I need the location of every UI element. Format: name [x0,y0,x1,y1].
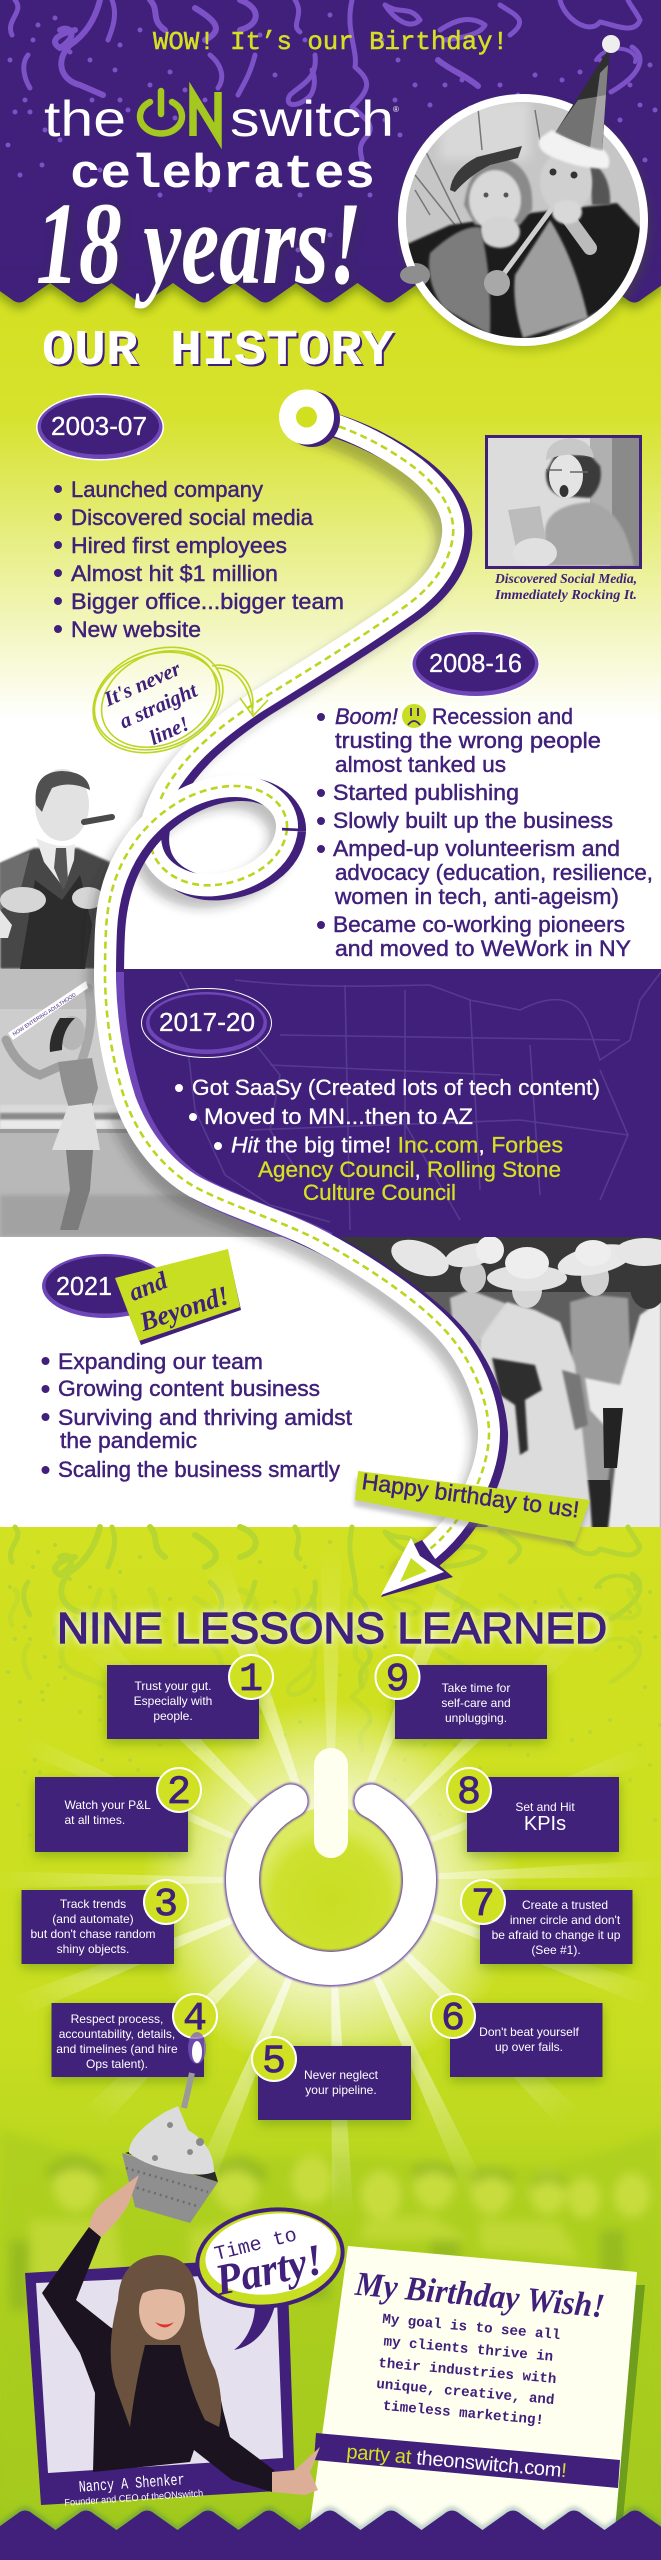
lesson 6 [431,1994,602,2077]
card footer band: party at theonswitch.com! [346,2441,568,2482]
sticker: and beyond [115,1249,241,1345]
sticker: and beyond: Beyond! [135,1280,233,1337]
hand pointing up [89,2175,139,2237]
lesson 7: Create a trusted [522,1898,608,1912]
lesson 3: Track trends [60,1897,126,1911]
party hat [539,35,620,168]
lesson 3: but don't chase random [30,1927,156,1941]
list: 2017-20: Hit the big time! Inc.com, Forbes [231,1132,563,1158]
photo caption: Immediately Rocking It. [494,587,637,602]
photo caption [494,571,637,602]
hats [386,1233,454,1283]
label: 2017-20: 2017-20 [159,1007,255,1037]
hand pointing right [272,2447,320,2495]
callout: it's never a straight line [77,629,268,771]
tinsel [429,227,490,335]
lesson 9 [376,1655,547,1739]
lower lime section [0,1527,661,2560]
icon: power O [140,91,218,136]
lesson 9: 9 [385,1658,410,1703]
left lady [450,1290,510,1400]
sticker: and beyond: and [125,1267,172,1307]
white area cut-out left of road [0,1237,489,1529]
road start circle [279,390,340,447]
heading: celebrates: celebrates [70,149,375,202]
list: 2021 and beyond [46,1349,352,1482]
lesson 8: KPIs [524,1813,566,1835]
white history area [0,720,661,1530]
right lady [585,1300,661,1529]
list: 2003-07: Hired first employees [71,533,287,558]
lesson 4: Ops talent). [86,2057,148,2071]
list: 2021 and beyond: Surviving and thriving amidst [58,1405,352,1430]
logo: theONswitch: the [44,91,126,147]
list: 2003-07 [58,477,344,642]
founder name: Nancy A Shenker [78,2471,185,2497]
label: 2008-16 [411,630,540,698]
lesson 4: 4 [183,1997,207,2042]
lesson 5: 5 [262,2040,286,2085]
list: 2008-16: Boom! [335,704,398,729]
birthday wish card [309,2246,645,2530]
lesson 2: 2 [167,1771,191,1816]
banner [8,981,88,1040]
founder photo frame [25,2175,295,2509]
list: 2021 and beyond: Growing content business [58,1376,320,1401]
lesson 4 [52,1994,217,2077]
label: 2017-20 [142,988,272,1058]
list: 2008-16: Amped-up volunteerism and [333,836,620,861]
lesson 1: 1 [239,1658,263,1703]
list: 2008-16: Recession and [432,704,573,729]
callout: it's never a straight line: line! [146,711,193,750]
lesson 9: Take time for [442,1681,510,1695]
party horn [400,266,426,284]
lesson 2 [35,1768,201,1852]
lesson 7: inner circle and don't [510,1913,621,1927]
sticker: happy birthday to us [354,1468,590,1547]
lesson 2: Watch your P&L [64,1798,151,1812]
label: 2008-16: 2008-16 [429,648,522,678]
lesson 8: 8 [457,1771,481,1816]
lesson 7: (See #1). [531,1943,581,1957]
heading: nine lessons learned: NINE LESSONS LEARNED [57,1604,607,1653]
list: 2003-07: Bigger office...bigger team [71,589,344,614]
right middle lady [570,1295,630,1482]
time to party speech bubble [189,2198,351,2350]
lesson 9: self-care and [441,1696,511,1710]
lesson 7 [461,1880,632,1964]
list: 2008-16: women in tech, anti-ageism) [334,884,619,909]
photo: woman at beach [0,969,340,1237]
light rays and glow behind power icon [0,1540,661,2220]
lesson 4: accountability, details, [59,2027,175,2041]
founder name: Founder and CEO of theONswitch [64,2488,204,2509]
birthday wish card: My Birthday Wish! [353,2266,606,2325]
top tagline: WOW! It’s our Birthday! [153,27,508,57]
birthday wish card: timeless marketing! [382,2399,545,2429]
photo: ladies in hats [300,1233,661,1529]
founder name [64,2471,204,2509]
birthday wish card: their industries with [378,2356,557,2388]
lesson 6: Don't beat yourself [479,2025,580,2039]
center lady [480,1302,592,1529]
list: 2003-07: Almost hit $1 million [71,561,278,586]
lesson 4: and timelines (and hire [56,2042,178,2056]
lesson 5: your pipeline. [305,2083,377,2097]
list: 2021 and beyond: Scaling the business smartly [58,1457,340,1482]
woman right [590,160,610,205]
list: 2017-20: Got SaaSy (Created lots of tech content) [192,1075,600,1100]
faces [512,1272,542,1308]
lesson 6: up over fails. [495,2040,563,2054]
list: 2003-07: Discovered social media [71,505,314,530]
birthday wish card: my clients thrive in [383,2334,554,2366]
list: 2017-20: Culture Council [303,1180,456,1205]
logo: theONswitch [44,91,399,147]
sticker: happy birthday to us: Happy birthday to us! [360,1468,581,1523]
list: 2017-20: Moved to MN...then to AZ [204,1104,473,1129]
lesson 1 [107,1655,273,1739]
lesson 7: be afraid to change it up [492,1928,621,1942]
icon: sad face [402,704,426,728]
callout: it's never a straight line: a straight [116,677,202,733]
lesson 1: Especially with [134,1694,212,1708]
lesson 2: at all times. [64,1813,125,1827]
label: 2021 and beyond: 2021 [56,1271,112,1301]
lesson 8: Set and Hit [515,1800,575,1814]
dark clothing [405,203,645,345]
icon: cupcake [122,2032,218,2223]
time to party speech bubble: Time to [212,2224,299,2267]
list: 2008-16: and moved to WeWork in NY [335,936,631,961]
bottom purple wave [0,2506,661,2560]
lesson 1: Trust your gut. [135,1679,211,1693]
logo: theONswitch: ® [393,105,399,114]
crowd photo texture [0,2130,661,2510]
list: 2008-16: advocacy (education, resilience, [335,860,653,885]
photo caption: Discovered Social Media, [494,571,637,586]
banner: NOW ENTERING ADULTHOOD [12,992,78,1038]
founder photo: Nancy [42,2175,274,2492]
heading: 18 years: 18 years! [36,178,362,309]
lesson 1: people. [153,1709,193,1723]
lesson 6: 6 [441,1997,465,2042]
road segment two [105,786,496,1573]
label: 2003-07 [36,394,164,460]
history gradient background [0,283,661,720]
purple band: 2017-20 [105,969,661,1237]
lesson 5: Never neglect [304,2068,379,2082]
lesson 3: (and automate) [52,1912,134,1926]
birthday wish card: unique, creative, and [376,2377,555,2409]
lesson 3 [22,1880,188,1964]
timeline road [100,390,496,1597]
header panel [0,0,661,310]
arrow head [381,1538,453,1597]
time to party speech bubble: Party! [210,2235,327,2305]
woman left [464,157,532,225]
list: 2008-16 [321,704,653,961]
lesson 4: Respect process, [71,2012,163,2026]
road segment one [150,417,460,888]
label: 2003-07: 2003-07 [51,411,147,441]
lesson 8 [447,1768,619,1852]
photo: two women with party horns [398,35,650,351]
card footer band [314,2433,620,2488]
faint US map [180,972,661,1230]
list: 2021 and beyond: Expanding our team [58,1349,263,1374]
list: 2008-16: almost tanked us [335,752,506,777]
lesson 9: unplugging. [445,1711,507,1725]
list: 2008-16: Started publishing [333,780,519,805]
purple wave edge of header [0,270,661,308]
logo: theONswitch: switch [230,91,394,147]
icon: power symbol [242,1765,420,1968]
birthday wish card: My goal is to see all [382,2312,561,2344]
callout: it's never a straight line: It's never [99,656,185,711]
list: 2003-07: Launched company [71,477,263,502]
photo: man with cigar [0,769,112,969]
lesson 3: shiny objects. [57,1942,129,1956]
lesson 7: 7 [471,1883,495,1928]
list: 2008-16: Became co-working pioneers [333,912,625,937]
list: 2017-20: Agency Council, Rolling Stone [258,1157,561,1182]
list: 2017-20 [179,1075,600,1205]
road shadow [100,427,484,1580]
list: 2003-07: New website [71,617,201,642]
lesson 3: 3 [154,1883,178,1928]
label: 2021 and beyond [40,1249,241,1345]
photo: shocked woman with phone [485,435,642,569]
lesson 5 [252,2037,411,2120]
heading: our history: OUR HISTORY [44,325,396,382]
list: 2008-16: Slowly built up the business [333,808,613,833]
list: 2021 and beyond: the pandemic [60,1428,197,1453]
heading: 18 years: 18 years! [38,181,364,312]
list: 2008-16: trusting the wrong people [335,728,601,753]
heading: our history: OUR HISTORY [42,323,394,380]
